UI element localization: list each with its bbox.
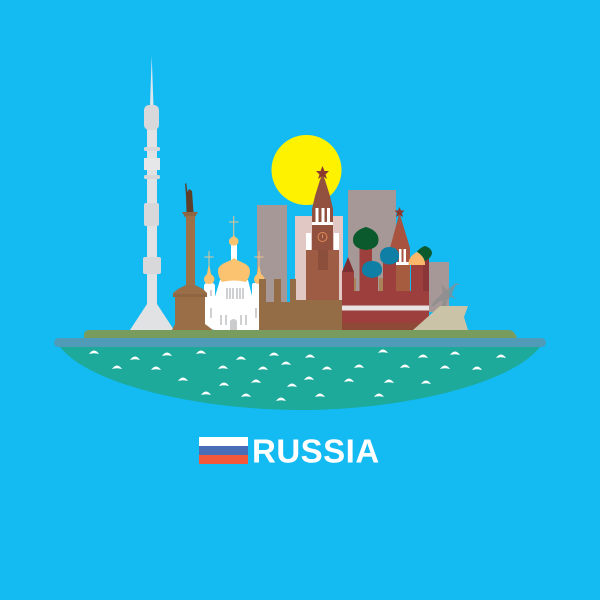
background buildings bbox=[257, 190, 449, 312]
spire body bbox=[396, 262, 410, 292]
Saint Basil's cathedral bbox=[342, 207, 432, 330]
bronze horseman statue bbox=[431, 283, 460, 306]
waves bbox=[89, 350, 506, 401]
domes bbox=[353, 227, 378, 250]
small domes bbox=[229, 234, 238, 246]
island ground bbox=[84, 330, 517, 338]
Alexander column bbox=[172, 184, 213, 330]
title: RUSSIA: RUSSIA bbox=[252, 432, 380, 470]
Kremlin wall bbox=[259, 279, 342, 330]
sea bbox=[60, 347, 540, 410]
Spasskaya tower bbox=[306, 166, 339, 300]
Russian flag bbox=[199, 437, 248, 464]
central body bbox=[214, 280, 253, 330]
white cathedral bbox=[204, 216, 264, 330]
statue rock pedestal bbox=[413, 306, 468, 330]
windows bbox=[211, 288, 256, 325]
clock bbox=[318, 232, 327, 242]
star bbox=[316, 166, 329, 179]
crosses bbox=[204, 216, 264, 266]
main golden dome bbox=[218, 258, 250, 282]
back spire bbox=[390, 213, 410, 265]
sun bbox=[272, 135, 342, 205]
TV tower bbox=[130, 56, 174, 330]
shore band bbox=[54, 338, 546, 347]
towers and body bbox=[342, 272, 354, 312]
side towers bbox=[204, 283, 215, 330]
